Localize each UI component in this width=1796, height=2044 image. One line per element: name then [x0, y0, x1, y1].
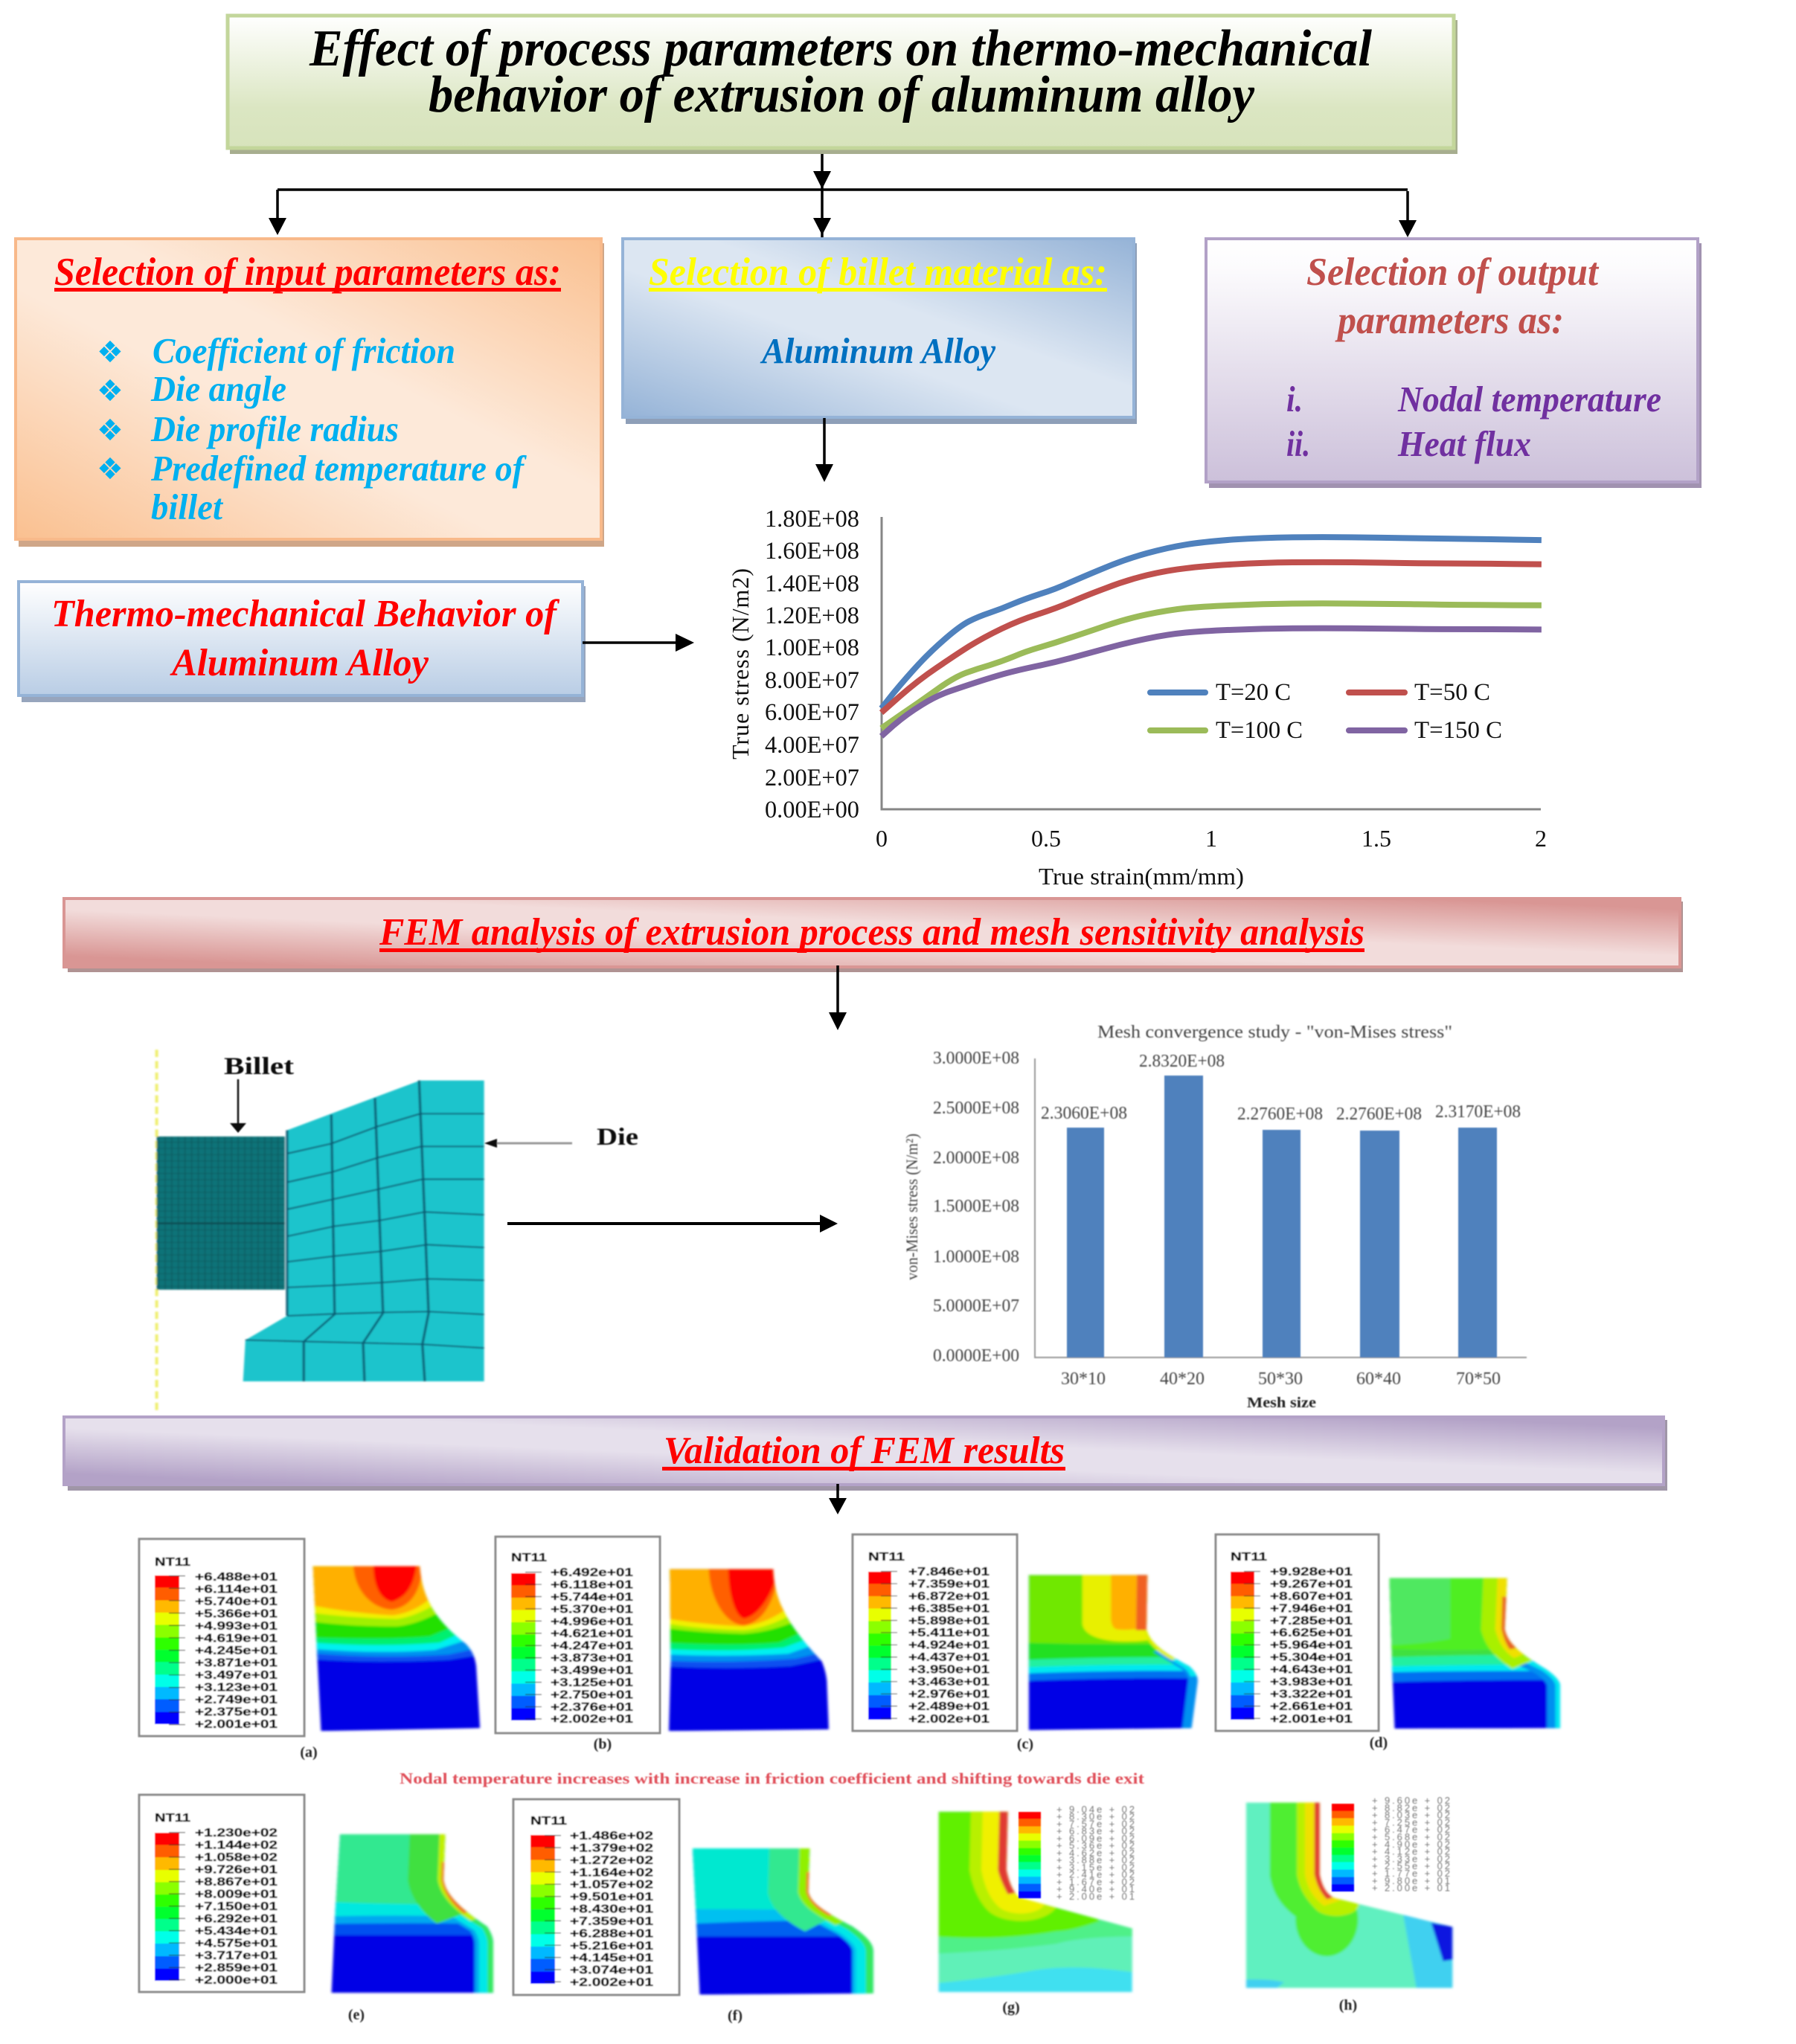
thermo-mechanical text	[51, 593, 560, 684]
contour plot (b)	[495, 1537, 838, 1752]
legend (e): +1.144e+02	[195, 1839, 278, 1852]
FEM banner heading: FEM analysis of extrusion process and mesh sensitivity analysis	[379, 911, 1364, 954]
y axis labels	[765, 506, 859, 823]
colorbar (g)	[1019, 1804, 1135, 1902]
bars	[1067, 1076, 1497, 1357]
colorbar (g): + 6.83e + 02	[1056, 1825, 1135, 1836]
contour plot (g)	[933, 1804, 1142, 2016]
colorbar (h): + 9.80e + 01	[1372, 1875, 1450, 1886]
chart legend: T=20 C	[1216, 679, 1291, 706]
caption (e): (e)	[348, 2007, 365, 2023]
panel: billet material	[623, 239, 1137, 424]
bar value labels	[1041, 1052, 1521, 1124]
legend (b): +3.499e+01	[551, 1665, 633, 1677]
contour shape (c)	[1023, 1572, 1203, 1733]
legend (c)	[853, 1534, 1017, 1731]
contour shape (a)	[307, 1562, 487, 1735]
legend (b): +6.492e+01	[551, 1566, 633, 1579]
bar value labels: 2.2760E+08	[1237, 1105, 1323, 1124]
legend (c): +4.437e+01	[908, 1651, 990, 1664]
bullet list of input parameters: Die angle	[150, 368, 286, 409]
output list: ii.	[1286, 423, 1310, 464]
legend (b): +4.621e+01	[551, 1627, 633, 1640]
legend (a): +4.993e+01	[195, 1620, 278, 1633]
chart legend: T=150 C	[1414, 717, 1502, 744]
output list	[1286, 379, 1661, 464]
x axis labels	[876, 825, 1547, 852]
contour shape (h)	[1242, 1800, 1460, 1991]
output list: Heat flux	[1397, 423, 1531, 464]
bar chart y labels: 2.5000E+08	[933, 1099, 1019, 1118]
legend (f): +5.216e+01	[570, 1940, 653, 1953]
legend (e): +2.000e+01	[195, 1974, 278, 1987]
legend (c): +6.872e+01	[908, 1590, 990, 1603]
bullet list of input parameters: ❖	[97, 414, 124, 448]
bullet list of input parameters: billet	[151, 486, 223, 527]
input parameters heading: Selection of input parameters as:	[54, 251, 561, 294]
contour shape (g)	[933, 1807, 1142, 1996]
billet material name: Aluminum Alloy	[760, 330, 995, 371]
title banner	[228, 16, 1457, 154]
colorbar (g): + 4.62e + 02	[1056, 1848, 1135, 1858]
legend (e): +9.726e+01	[195, 1864, 278, 1876]
legend (b): +3.873e+01	[551, 1652, 633, 1665]
legend (e): +3.717e+01	[195, 1950, 278, 1962]
colorbar (h): + 1.77e + 02	[1372, 1868, 1450, 1879]
y axis labels: 6.00E+07	[765, 699, 859, 726]
billet and die drawing	[157, 1050, 484, 1414]
legend (e): +2.859e+01	[195, 1962, 278, 1974]
legend (e): +1.230e+02	[195, 1827, 278, 1839]
legend (b): +5.370e+01	[551, 1604, 633, 1616]
legend (a): +3.123e+01	[195, 1681, 278, 1694]
contour plot (d)	[1216, 1534, 1569, 1751]
legend (c): +7.359e+01	[908, 1578, 990, 1590]
bar chart y labels	[933, 1049, 1019, 1366]
legend (a): +3.497e+01	[195, 1669, 278, 1682]
bar category labels	[1061, 1369, 1501, 1389]
legend (c): +3.950e+01	[908, 1663, 990, 1677]
legend (c): NT11	[868, 1551, 905, 1563]
legend (c): +6.385e+01	[908, 1602, 990, 1616]
bar category labels: 30*10	[1061, 1369, 1106, 1389]
legend (b): +5.744e+01	[551, 1591, 633, 1604]
contour shape (e)	[326, 1830, 501, 1996]
legend (f)	[513, 1799, 679, 1995]
legend (e): +4.575e+01	[195, 1937, 278, 1950]
curve T=20 C	[882, 537, 1542, 708]
bar value labels: 2.8320E+08	[1139, 1052, 1225, 1071]
output heading: Selection of output	[1306, 251, 1600, 294]
bullet list of input parameters: Die profile radius	[150, 408, 399, 449]
y axis labels: 0.00E+00	[765, 797, 859, 823]
output heading: parameters as:	[1335, 299, 1564, 342]
caption (c): (c)	[1017, 1736, 1033, 1752]
caption (f): (f)	[728, 2008, 743, 2024]
legend (b): +2.002e+01	[551, 1713, 633, 1726]
legend (c): +2.489e+01	[908, 1700, 990, 1713]
caption (d): (d)	[1370, 1735, 1388, 1751]
legend (b): +2.750e+01	[551, 1688, 633, 1702]
legend (d): +7.946e+01	[1270, 1602, 1353, 1616]
legend (d): +5.304e+01	[1270, 1651, 1353, 1664]
y axis labels: 8.00E+07	[765, 667, 859, 694]
colorbar (h): + 4.12e + 02	[1372, 1846, 1450, 1857]
bar chart x title: Mesh size	[1247, 1395, 1316, 1411]
colorbar (g): + 7.57e + 02	[1056, 1818, 1135, 1830]
legend (e)	[139, 1795, 304, 1992]
bar chart y labels: 1.5000E+08	[933, 1197, 1019, 1216]
chart legend: T=100 C	[1216, 717, 1303, 744]
legend (d): +2.661e+01	[1270, 1700, 1353, 1713]
colorbar (h): + 4.90e + 02	[1372, 1839, 1450, 1850]
legend (f): +1.272e+02	[570, 1854, 653, 1867]
legend (f): +3.074e+01	[570, 1964, 653, 1977]
colorbar (h): + 8.82e + 02	[1372, 1802, 1450, 1813]
bar chart y labels: 1.0000E+08	[933, 1247, 1019, 1267]
legend (a): +3.871e+01	[195, 1657, 278, 1669]
bar value labels: 2.3060E+08	[1041, 1104, 1127, 1123]
y axis labels: 1.20E+08	[765, 602, 859, 629]
x axis labels: 0.5	[1031, 825, 1061, 852]
legend (a): NT11	[155, 1556, 190, 1569]
arrow: validation banner to contours	[829, 1484, 847, 1514]
chart legend: T=50 C	[1414, 679, 1490, 706]
legend (f): +7.359e+01	[570, 1915, 653, 1928]
figure: billet and die mesh	[157, 1050, 638, 1414]
legend (d): NT11	[1231, 1551, 1267, 1563]
bar chart y labels: 5.0000E+07	[933, 1296, 1019, 1316]
legend (e): +6.292e+01	[195, 1913, 278, 1925]
die label and arrow: Die	[597, 1124, 638, 1151]
legend (a): +4.245e+01	[195, 1645, 278, 1657]
bullet list of input parameters: Predefined temperature of	[150, 448, 527, 489]
contour plot (a)	[139, 1539, 487, 1761]
bar chart axes	[1035, 1058, 1527, 1357]
contour plot (e)	[139, 1795, 501, 2023]
y axis labels: 1.40E+08	[765, 571, 859, 597]
legend (f): +1.057e+02	[570, 1879, 653, 1892]
legend (c): +5.898e+01	[908, 1615, 990, 1627]
legend (b): +4.247e+01	[551, 1639, 633, 1653]
title line 1: Effect of process parameters on thermo-mechanical	[309, 20, 1373, 77]
mesh convergence bar chart	[902, 1023, 1527, 1411]
x axis title: True strain(mm/mm)	[1039, 863, 1244, 890]
legend (a)	[139, 1539, 304, 1736]
colorbar (g): + 6.09e + 02	[1056, 1833, 1135, 1844]
legend (d)	[1216, 1534, 1379, 1731]
legend (f): +8.430e+01	[570, 1903, 653, 1916]
x axis labels: 1	[1205, 825, 1217, 852]
caption (b): (b)	[594, 1736, 612, 1752]
caption (a): (a)	[300, 1744, 318, 1761]
banner: FEM analysis	[64, 899, 1683, 972]
x axis labels: 2	[1535, 825, 1547, 852]
series curves	[882, 537, 1542, 736]
colorbar (g): + 8.30e + 02	[1056, 1811, 1135, 1822]
contour plot (c)	[853, 1534, 1203, 1752]
bullet list of input parameters: Coefficient of friction	[153, 330, 455, 371]
legend (c): +4.924e+01	[908, 1639, 990, 1651]
legend (a): +6.488e+01	[195, 1571, 278, 1584]
legend (c): +5.411e+01	[908, 1627, 990, 1639]
curve T=50 C	[882, 562, 1542, 713]
bar chart y title: von-Mises stress (N/m²)	[902, 1134, 921, 1280]
bullet list of input parameters	[97, 330, 527, 527]
bar chart y labels: 0.0000E+00	[933, 1346, 1019, 1366]
legend (f): +1.486e+02	[570, 1830, 653, 1842]
arrows: title to three selection boxes	[269, 149, 1417, 240]
bar category labels: 70*50	[1456, 1369, 1501, 1389]
y axis labels: 1.00E+08	[765, 634, 859, 661]
legend (d): +4.643e+01	[1270, 1663, 1353, 1677]
billet label and arrow: Billet	[224, 1053, 294, 1080]
legend (e): +8.009e+01	[195, 1888, 278, 1901]
legend (d): +2.001e+01	[1270, 1713, 1353, 1726]
contour shape (d)	[1384, 1575, 1569, 1733]
die label and arrow	[484, 1124, 638, 1151]
y axis labels: 2.00E+07	[765, 765, 859, 791]
colorbar (g): + 2.00e + 01	[1056, 1891, 1135, 1902]
legend (c): +2.976e+01	[908, 1688, 990, 1700]
thermo-mechanical text: Aluminum Alloy	[170, 642, 429, 684]
output list: i.	[1286, 379, 1303, 420]
legend (d): +3.322e+01	[1270, 1688, 1353, 1700]
legend (a): +6.114e+01	[195, 1583, 278, 1596]
red caption: nodal temperature: Nodal temperature increases with increase in friction coefficient and shifting towards die exit	[400, 1770, 1144, 1787]
legend (a): +2.001e+01	[195, 1718, 278, 1731]
billet heading: Selection of billet material as:	[649, 251, 1107, 294]
bar value labels: 2.2760E+08	[1336, 1105, 1422, 1124]
panel: thermo-mechanical behavior	[19, 582, 586, 702]
colorbar (g): + 9.04e + 02	[1056, 1804, 1135, 1815]
colorbar (h): + 2.55e + 02	[1372, 1860, 1450, 1871]
colorbar (h): + 5.68e + 02	[1372, 1831, 1450, 1842]
title line 2: behavior of extrusion of aluminum alloy	[429, 66, 1255, 123]
bar chart y labels: 2.0000E+08	[933, 1148, 1019, 1168]
legend (f): +6.288e+01	[570, 1927, 653, 1940]
x axis labels: 1.5	[1362, 825, 1391, 852]
banner: validation of FEM results	[64, 1417, 1667, 1491]
colorbar (h): + 7.25e + 02	[1372, 1816, 1450, 1828]
legend (a): +2.375e+01	[195, 1706, 278, 1718]
legend (c): +2.002e+01	[908, 1713, 990, 1726]
legend (c): +7.846e+01	[908, 1566, 990, 1578]
legend (e): +5.434e+01	[195, 1925, 278, 1938]
caption (g): (g)	[1002, 1999, 1020, 2016]
colorbar (h): + 2.00e + 01	[1372, 1883, 1450, 1894]
arrow: behavior box to chart	[583, 634, 694, 652]
contour plot (f)	[513, 1799, 881, 2024]
y axis labels: 1.60E+08	[765, 538, 859, 565]
legend (b): +3.125e+01	[551, 1677, 633, 1689]
bar chart title: Mesh convergence study - "von-Mises stress"	[1097, 1023, 1452, 1042]
x axis labels: 0	[876, 825, 888, 852]
legend (b)	[495, 1537, 660, 1733]
legend (d): +5.964e+01	[1270, 1639, 1353, 1651]
legend (a): +4.619e+01	[195, 1632, 278, 1645]
bar category labels: 40*20	[1160, 1369, 1205, 1389]
bullet list of input parameters: ❖	[97, 452, 124, 486]
legend (f): +1.379e+02	[570, 1842, 653, 1854]
contour shape (b)	[663, 1564, 838, 1735]
legend (f): +1.164e+02	[570, 1866, 653, 1879]
legend (e): +8.867e+01	[195, 1876, 278, 1889]
colorbar (h)	[1332, 1795, 1450, 1894]
bar value labels: 2.3170E+08	[1435, 1102, 1521, 1122]
thermo-mechanical text: Thermo-mechanical Behavior of	[51, 593, 560, 635]
legend (f): NT11	[530, 1815, 567, 1828]
arrow: billet to stress-strain chart	[815, 418, 833, 482]
legend (f): +4.145e+01	[570, 1952, 653, 1964]
legend (e): +7.150e+01	[195, 1900, 278, 1913]
bar category labels: 60*40	[1356, 1369, 1401, 1389]
curve T=150 C	[882, 629, 1542, 736]
panel: input parameters	[16, 239, 604, 547]
contour shape (f)	[687, 1845, 881, 1999]
colorbar (g): + 3.15e + 02	[1056, 1862, 1135, 1873]
panel: output parameters	[1206, 239, 1702, 488]
colorbar (g): + 2.41e + 02	[1056, 1869, 1135, 1880]
colorbar (h): + 8.03e + 02	[1372, 1810, 1450, 1821]
caption (h): (h)	[1339, 1997, 1357, 2014]
legend (a): +5.366e+01	[195, 1608, 278, 1620]
legend (b): +6.118e+01	[551, 1578, 633, 1592]
bar chart y labels: 3.0000E+08	[933, 1049, 1019, 1068]
legend (d): +8.607e+01	[1270, 1590, 1353, 1603]
output list: Nodal temperature	[1397, 379, 1661, 420]
y axis labels: 4.00E+07	[765, 732, 859, 759]
colorbar (g): + 3.88e + 02	[1056, 1854, 1135, 1865]
y axis title: True stress (N/m2)	[727, 568, 754, 759]
stress-strain line chart	[727, 506, 1547, 890]
chart axes	[882, 517, 1541, 809]
arrow: mesh figure to convergence chart	[507, 1215, 838, 1232]
colorbar (h): + 9.60e + 02	[1372, 1795, 1450, 1806]
bullet list of input parameters: ❖	[97, 335, 124, 370]
legend (b): +2.376e+01	[551, 1701, 633, 1714]
curve T=100 C	[882, 603, 1542, 728]
legend (c): +3.463e+01	[908, 1676, 990, 1688]
legend (f): +9.501e+01	[570, 1891, 653, 1903]
legend (d): +9.267e+01	[1270, 1578, 1353, 1590]
legend (d): +6.625e+01	[1270, 1627, 1353, 1639]
colorbar (g): + 5.36e + 02	[1056, 1840, 1135, 1851]
chart legend	[1150, 679, 1502, 744]
arrow: FEM banner to figures	[829, 965, 847, 1030]
bar category labels: 50*30	[1258, 1369, 1303, 1389]
legend (e): +1.058e+02	[195, 1851, 278, 1864]
output heading	[1306, 251, 1600, 342]
colorbar (h): + 3.33e + 02	[1372, 1853, 1450, 1864]
colorbar (g): + 1.67e + 02	[1056, 1876, 1135, 1888]
legend (a): +5.740e+01	[195, 1595, 278, 1608]
contour plot (h)	[1242, 1795, 1460, 2014]
colorbar (g): + 9.40e + 01	[1056, 1883, 1135, 1894]
legend (f): +2.002e+01	[570, 1976, 653, 1989]
legend (d): +9.928e+01	[1270, 1566, 1353, 1578]
colorbar (h): + 6.47e + 02	[1372, 1824, 1450, 1835]
legend (e): NT11	[155, 1812, 190, 1825]
legend (b): NT11	[511, 1552, 547, 1564]
legend (a): +2.749e+01	[195, 1694, 278, 1706]
legend (d): +3.983e+01	[1270, 1676, 1353, 1688]
bullet list of input parameters: ❖	[97, 374, 124, 408]
billet label and arrow	[224, 1053, 294, 1133]
validation heading: Validation of FEM results	[664, 1430, 1065, 1472]
legend (b): +4.996e+01	[551, 1616, 633, 1628]
y axis labels: 1.80E+08	[765, 506, 859, 533]
legend (d): +7.285e+01	[1270, 1615, 1353, 1627]
